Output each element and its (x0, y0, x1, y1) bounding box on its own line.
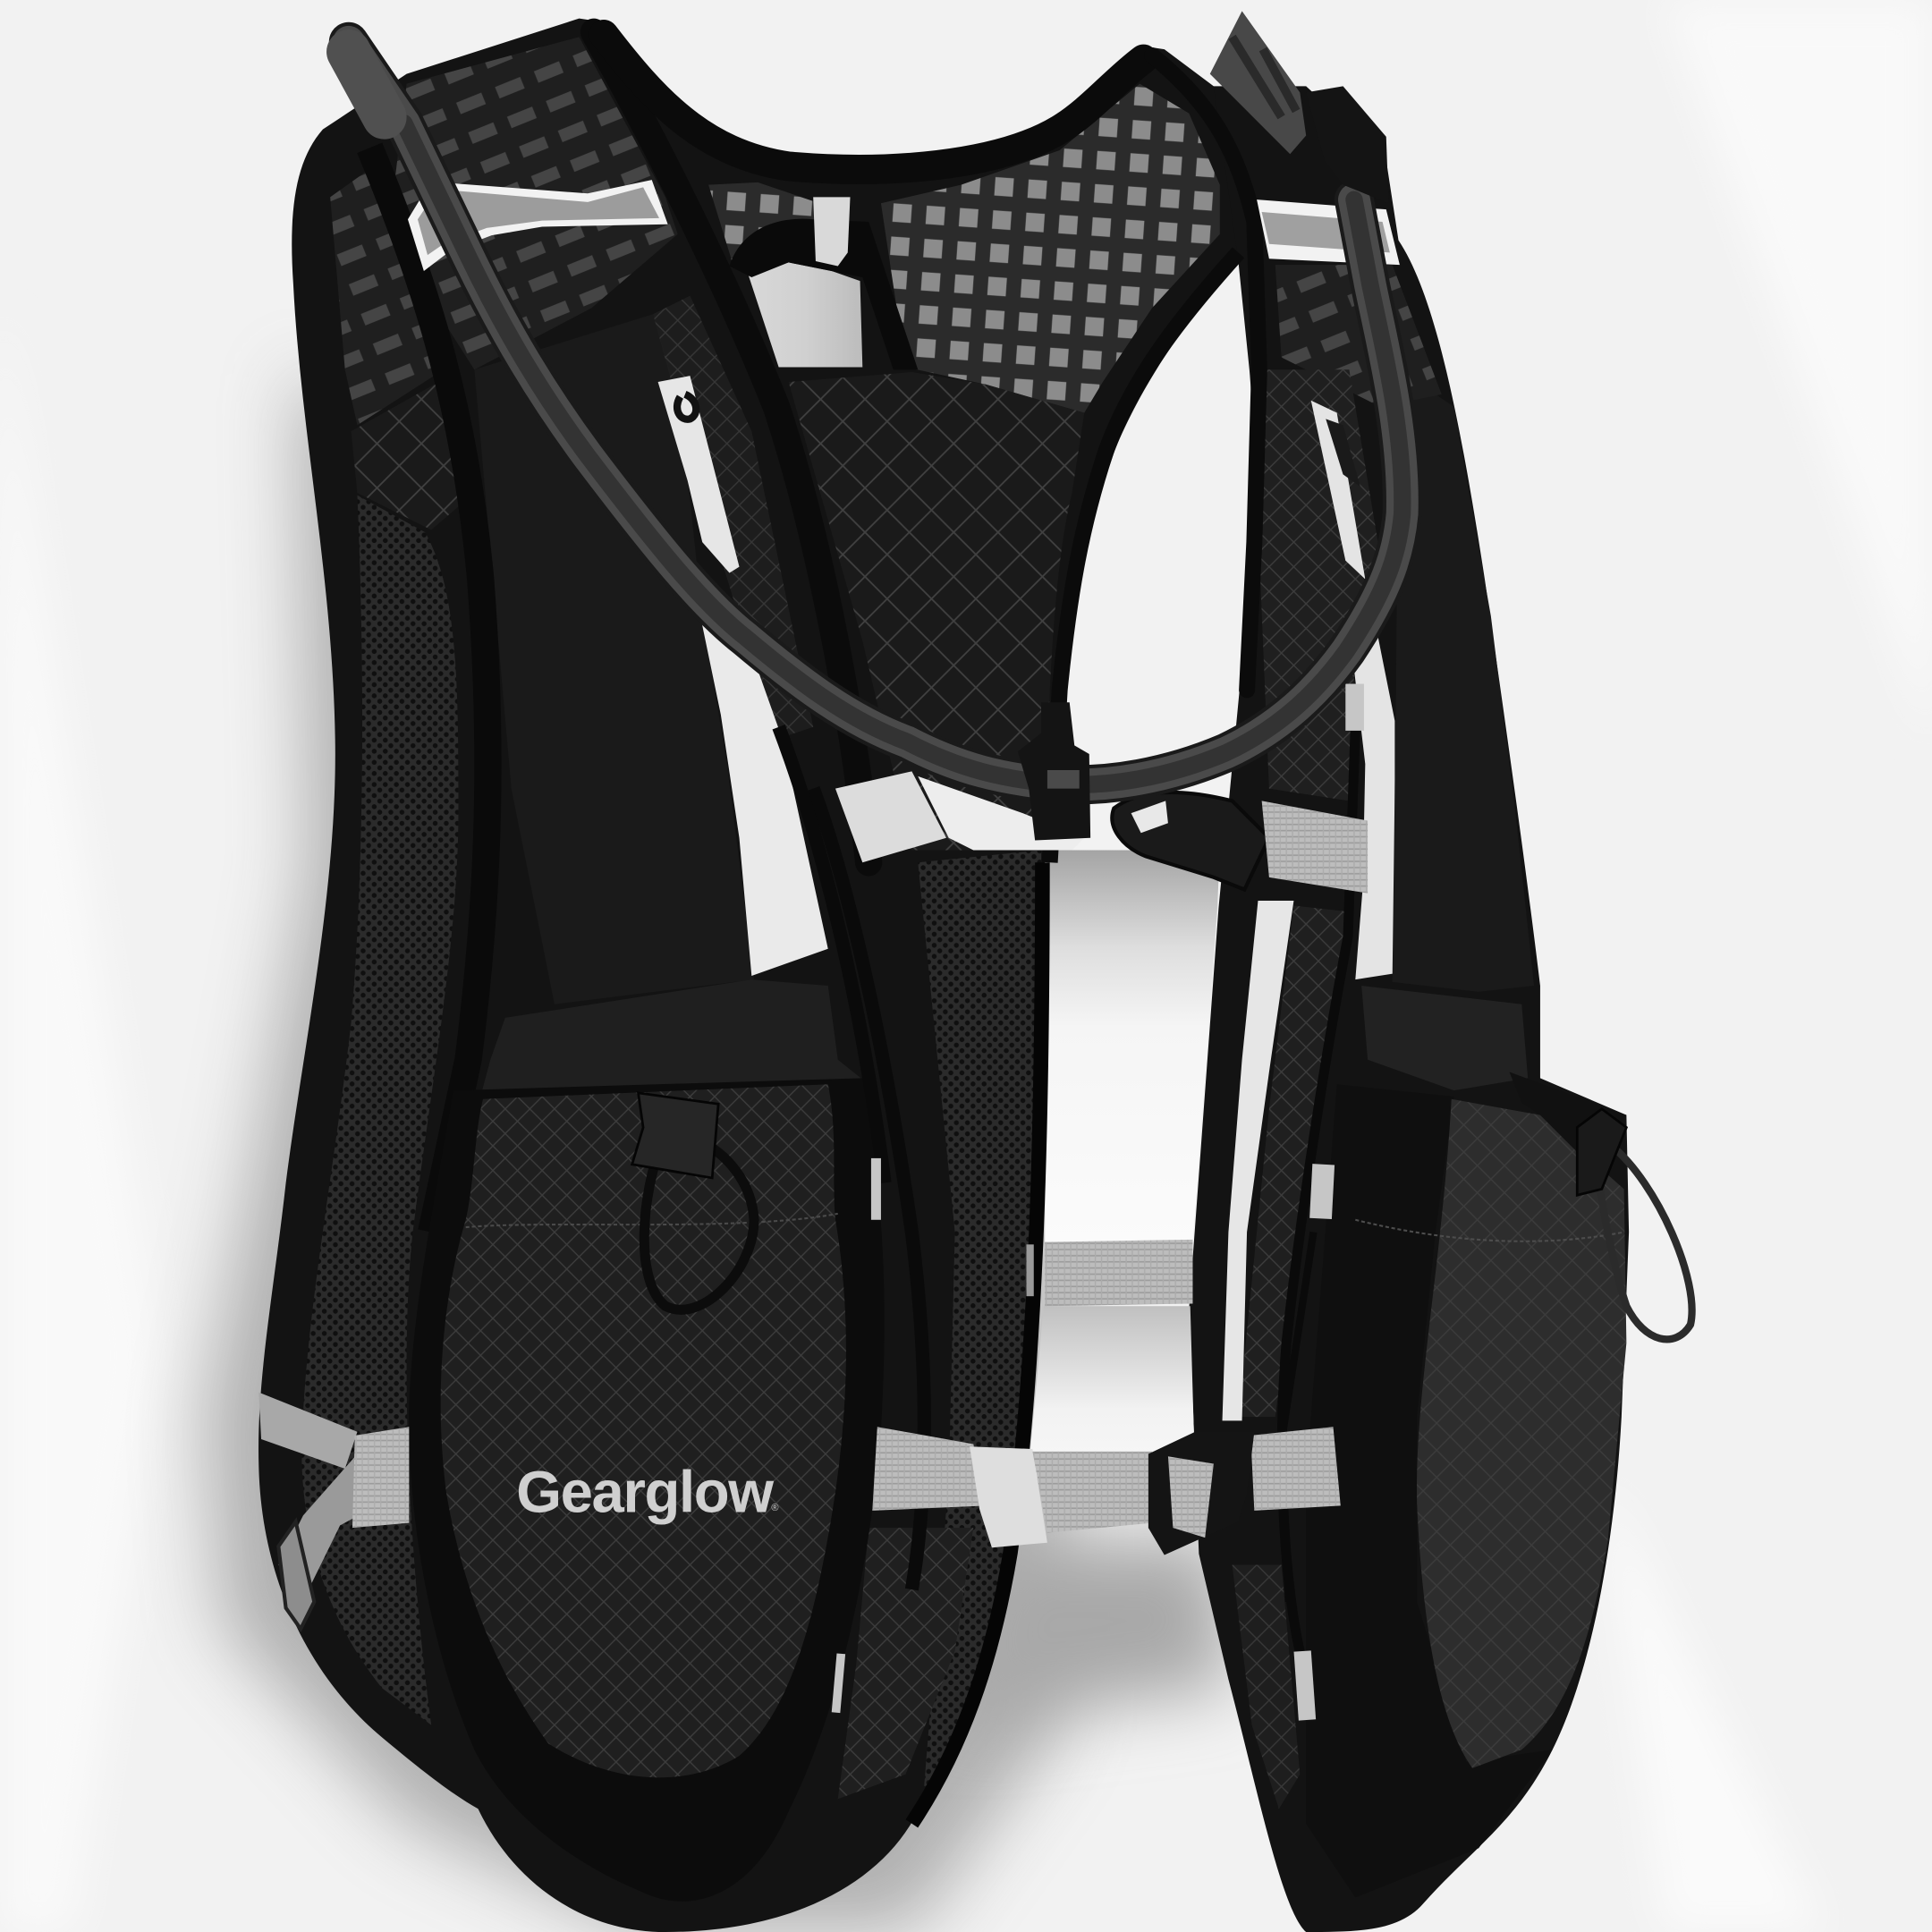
lower chest zip strip (699, 604, 828, 976)
vest body: right panel (1189, 86, 1629, 1932)
hole behind the neck (748, 262, 862, 368)
hose clip (1018, 702, 1090, 840)
tube: right shock cord (1282, 727, 1355, 1657)
logo registered mark: ® (771, 1503, 778, 1513)
centre gap: upper section (1045, 851, 1220, 1242)
right upper zip (1311, 401, 1365, 579)
left pocket seam (466, 1214, 838, 1227)
pocket panel beside chest zip (653, 296, 813, 740)
left cord lock and loop (632, 1093, 754, 1309)
centre webbing strap (1045, 1240, 1192, 1306)
black vertical binding on left side (369, 148, 487, 1233)
chest webbing strap: upper left (835, 771, 1084, 862)
binding: left of the gap (911, 862, 1042, 1824)
right white stripe (1223, 901, 1293, 1420)
diamond panel: centre back (789, 372, 1084, 851)
lower right panel (1233, 1564, 1300, 1809)
reflective strap: left shoulder (408, 180, 668, 271)
upper fabric above right pocket (1361, 986, 1528, 1090)
lower buckle (1148, 1432, 1254, 1555)
tube: right second cord (1282, 1233, 1313, 1602)
solid panel: chest (474, 314, 754, 1004)
upper chest zip (658, 376, 740, 573)
left shoulder strap (594, 32, 869, 862)
hydration hose (349, 42, 1402, 784)
logo: Gearglow: Gearglow (516, 1459, 775, 1525)
right pocket seam (1355, 1220, 1624, 1241)
right shoulder strap (1152, 55, 1259, 690)
reflective strap: right shoulder (1257, 199, 1400, 265)
inner arch binding (1050, 252, 1238, 862)
right mid panel (1238, 905, 1349, 1417)
soft drop shadow (203, 369, 1060, 1932)
upper mesh: far-left strip (330, 160, 450, 425)
upper mesh: back panel (881, 84, 1220, 412)
right cord lock and loop (1577, 1109, 1692, 1339)
dot mesh: centre back lower (918, 851, 1041, 1786)
upper mesh: left shoulder (394, 37, 678, 369)
vest body: left panel and back (258, 19, 1282, 1932)
dot mesh: left side (301, 496, 458, 1725)
shadow under lower strap (949, 1540, 1233, 1725)
left side strap (258, 1393, 409, 1629)
reflective strap: right chest (1353, 610, 1394, 979)
diamond fabric: below the strap (838, 1528, 973, 1799)
lower webbing strap: full span (872, 1427, 1341, 1547)
pocket: left (409, 1078, 885, 1902)
neck loop (730, 197, 918, 369)
centre gap: between straps (1028, 1306, 1195, 1479)
diamond panel: lower shoulder (352, 376, 474, 530)
chest webbing strap: upper right (1262, 801, 1368, 894)
diamond panel: right inner (1257, 369, 1386, 801)
small mesh by the neck loop (708, 182, 819, 265)
solid panel: right chest (1393, 369, 1534, 992)
right zip pull (1326, 419, 1360, 487)
chest buckle (1112, 792, 1269, 890)
tubes: left pocket edge (779, 727, 924, 1589)
upper fabric above left pocket (480, 979, 869, 1097)
metal tips (832, 684, 1364, 1721)
neck binding (604, 35, 1143, 169)
pocket: right (1306, 1072, 1626, 1897)
zip pull (677, 394, 696, 419)
bite valve (1210, 11, 1388, 203)
buckle window (1131, 801, 1168, 833)
mesh: right shoulder (1275, 265, 1442, 407)
